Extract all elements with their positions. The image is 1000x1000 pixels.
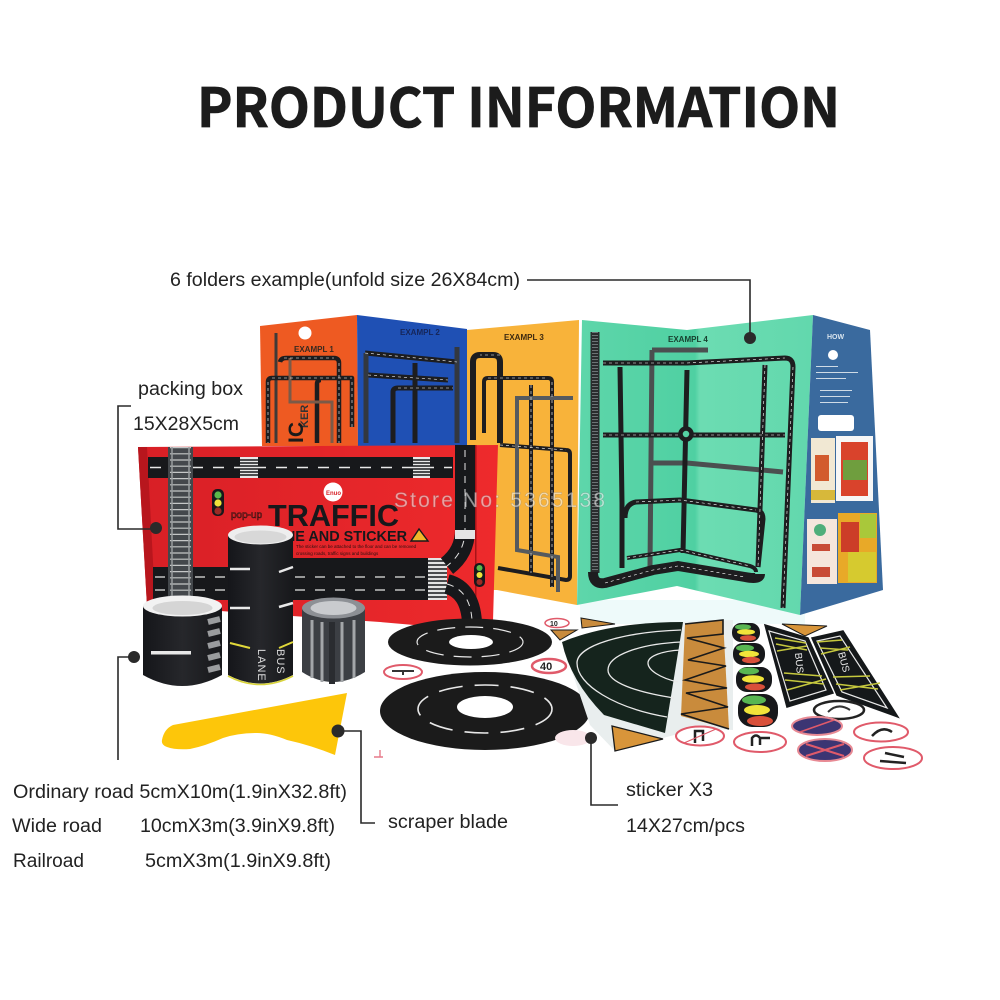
sticker sheet (374, 618, 922, 769)
box title: LINE AND STICKER (272, 528, 407, 545)
icon: brand logo: Enuo (326, 491, 341, 497)
leader: sticker callout (585, 732, 618, 805)
folder page: orange example 1 (260, 315, 358, 446)
roll: ordinary road tape (143, 596, 222, 686)
lower road band (153, 558, 447, 600)
road sign stickers: 40 (540, 661, 552, 673)
bus stop strip stickers: BUS (792, 652, 805, 674)
bus stop strip stickers (765, 624, 898, 717)
road disk: large roundabout (380, 672, 590, 750)
label: scraper blade: scraper blade (388, 812, 508, 833)
folder page: blue example 2: EXAMPL 2 (400, 328, 440, 337)
icon: brand logo (324, 482, 342, 502)
panel: fold-out example folders (260, 315, 883, 615)
title: PRODUCT INFORMATION (197, 64, 840, 143)
label: road tape sizes: Wide road (12, 816, 102, 837)
leader: scraper callout (332, 724, 375, 823)
warning triangle stickers (551, 618, 729, 751)
road network (593, 332, 793, 608)
roll: wide bus lane tape: BUS (274, 649, 286, 675)
box title: The sticker can be attached to the floor and can be removed (296, 544, 417, 549)
label: packing box: 15X28X5cm (133, 414, 239, 435)
watermark: Store No: 5365138 (394, 489, 605, 512)
traffic light stickers (732, 623, 778, 727)
label: folders: 6 folders example(unfold size 26X84cm) (170, 270, 520, 291)
label: road tape sizes: Ordinary road 5cmX10m(1.9inX32.8ft) (13, 782, 347, 803)
label: packing box (133, 379, 244, 435)
box title: crossing roads, traffic signs and buildings (296, 551, 379, 556)
label: road tape sizes: 10cmX3m(3.9inX9.8ft) (140, 816, 335, 837)
folder page: orange example 1: KER (299, 405, 311, 428)
box title (231, 498, 417, 556)
road sign stickers: 10 (550, 621, 558, 628)
folder page: back cover: HOW (827, 334, 844, 341)
folder page: green example 4 (577, 315, 813, 615)
label: sticker (626, 780, 745, 837)
road arc sticker (562, 622, 683, 733)
roll: railroad tape (302, 598, 365, 684)
folder page: yellow example 3: EXAMPL 3 (504, 333, 544, 342)
roll: wide bus lane tape (228, 526, 293, 684)
folder page: orange example 1: EXAMPL 1 (294, 345, 334, 354)
label: sticker: sticker X3 (626, 780, 713, 801)
icon: second traffic light (474, 563, 485, 587)
small red mark (374, 750, 383, 757)
leader: folders callout (527, 280, 756, 344)
box title: TRAFFIC (268, 498, 399, 533)
road disk: small roundabout (388, 618, 552, 666)
panel: red packing box (138, 445, 605, 629)
icon: traffic light on box (212, 489, 224, 516)
box title: pop-up (231, 510, 263, 521)
label: sticker: 14X27cm/pcs (626, 816, 745, 837)
roll: wide bus lane tape: LANE (255, 649, 267, 682)
folder page: green example 4: EXAMPL 4 (668, 335, 708, 344)
folder page: back cover (800, 315, 883, 615)
label: road tape sizes (12, 782, 347, 872)
label: packing box: packing box (138, 379, 244, 400)
scraper blade (162, 693, 347, 755)
folder page: yellow example 3 (467, 320, 579, 605)
icon: warning sign on box (411, 529, 428, 541)
leader: packing box callout (118, 406, 162, 534)
top road band (148, 457, 453, 478)
vertical and curved road (447, 445, 475, 622)
folder page: blue example 2 (357, 315, 467, 446)
road sign stickers (384, 618, 922, 769)
railway strip (168, 447, 193, 597)
leader: tape rolls callout (118, 651, 140, 760)
label: road tape sizes: Railroad (13, 851, 84, 872)
bus stop strip stickers: BUS (835, 651, 851, 674)
label: road tape sizes: 5cmX3m(1.9inX9.8ft) (145, 851, 331, 872)
folder page: orange example 1: IC (285, 422, 308, 443)
